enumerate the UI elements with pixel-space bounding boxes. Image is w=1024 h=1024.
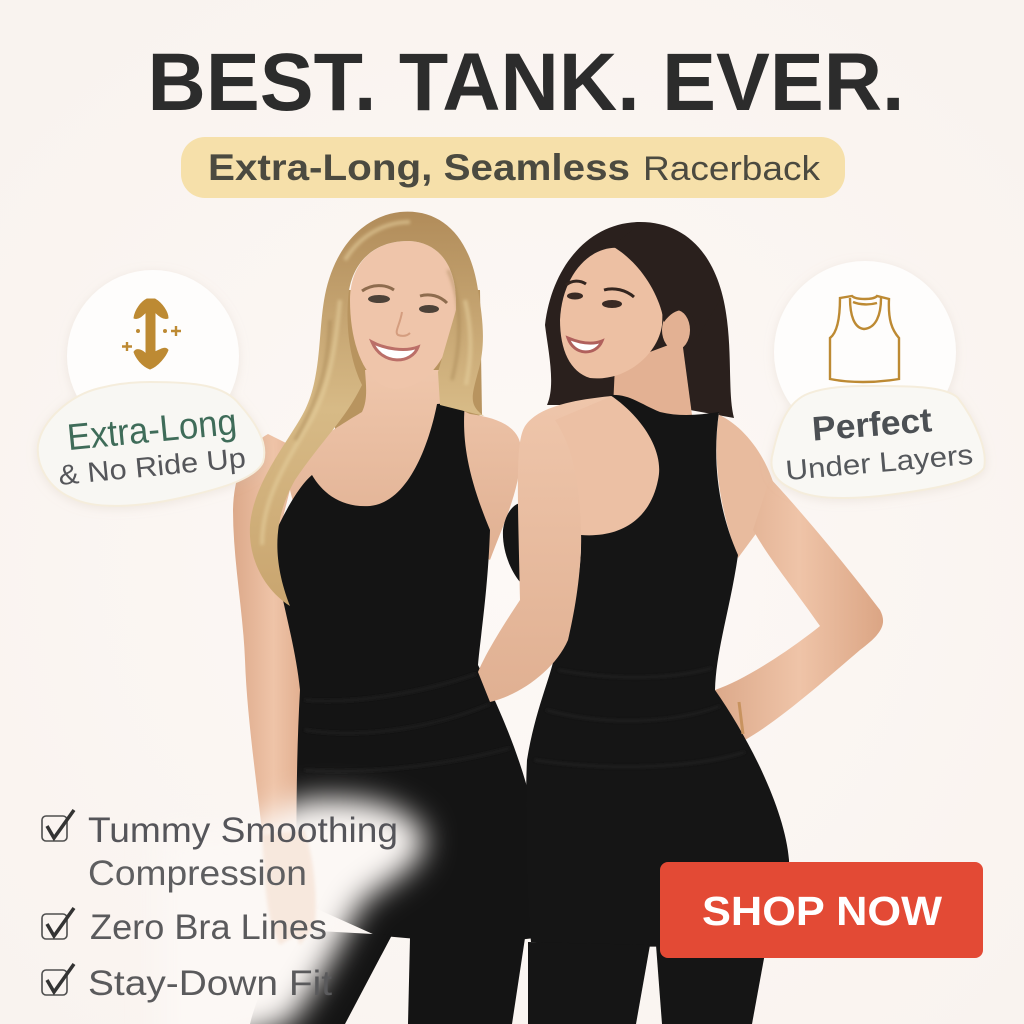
item: stay-down fit: Stay-Down Fit	[88, 964, 332, 1003]
neck	[612, 340, 694, 430]
faded hand	[262, 830, 316, 945]
right arm on hip	[715, 478, 883, 740]
left arm	[233, 434, 314, 945]
white fade over lower body	[160, 798, 425, 1024]
back hair	[335, 290, 482, 435]
right shoulder	[715, 413, 778, 558]
tank folds	[304, 674, 510, 771]
subtitle pill: Extra-Long, Seamless	[208, 147, 630, 188]
black tank	[272, 402, 540, 941]
hair highlights	[262, 222, 470, 545]
bracelet	[739, 702, 743, 734]
checklist	[42, 810, 398, 1003]
nose	[397, 312, 410, 336]
neck and chest	[285, 370, 521, 560]
photo: two models in black tanks	[160, 212, 883, 1024]
hair	[250, 212, 484, 606]
badge shape	[38, 270, 264, 506]
back skin	[540, 396, 668, 545]
item: tummy smoothing compression: Tummy Smoothing	[88, 811, 398, 850]
subtitle pill	[181, 137, 845, 198]
right eye	[419, 305, 439, 313]
black racerback tank	[526, 395, 789, 947]
badge text: perfect: Perfect	[811, 401, 933, 449]
right leg	[656, 942, 767, 1024]
eye	[567, 292, 583, 300]
icon: tank top outline	[830, 296, 899, 382]
ear	[662, 310, 690, 350]
left eye	[368, 295, 390, 303]
subtitle pill: Racerback	[643, 150, 821, 188]
item: tummy smoothing compression	[42, 810, 398, 893]
face	[560, 248, 662, 378]
model: left woman, blonde	[233, 212, 540, 1024]
badge text: no ride up: & No Ride Up	[57, 442, 247, 491]
eye	[602, 300, 622, 308]
left leg	[250, 930, 392, 1024]
brows	[362, 286, 447, 303]
tank folds	[534, 668, 745, 767]
icon: up-down arrow with sparkles	[122, 299, 181, 369]
hair side	[612, 224, 720, 340]
title: BEST. TANK. EVER.	[148, 37, 904, 128]
right leg	[408, 938, 525, 1024]
badge shape	[771, 261, 985, 498]
badge: extra-long	[38, 270, 264, 506]
back hair	[545, 222, 734, 418]
item: zero bra lines: Zero Bra Lines	[90, 908, 327, 947]
button: shop now	[660, 862, 983, 958]
brows	[566, 281, 634, 297]
button: shop now: SHOP NOW	[702, 888, 942, 934]
badge text: under layers: Under Layers	[784, 439, 974, 486]
item: tummy smoothing compression: Compression	[88, 854, 307, 893]
left arm across back	[478, 396, 612, 702]
face	[350, 241, 456, 389]
smile	[372, 342, 418, 360]
smile	[568, 338, 602, 352]
hair lowlights	[295, 270, 459, 440]
model: right woman, brunette	[478, 222, 883, 1024]
front bust	[503, 503, 520, 582]
badge: perfect under layers	[771, 261, 985, 498]
left leg	[528, 942, 650, 1024]
badge text: extra-long: Extra-Long	[65, 401, 239, 458]
